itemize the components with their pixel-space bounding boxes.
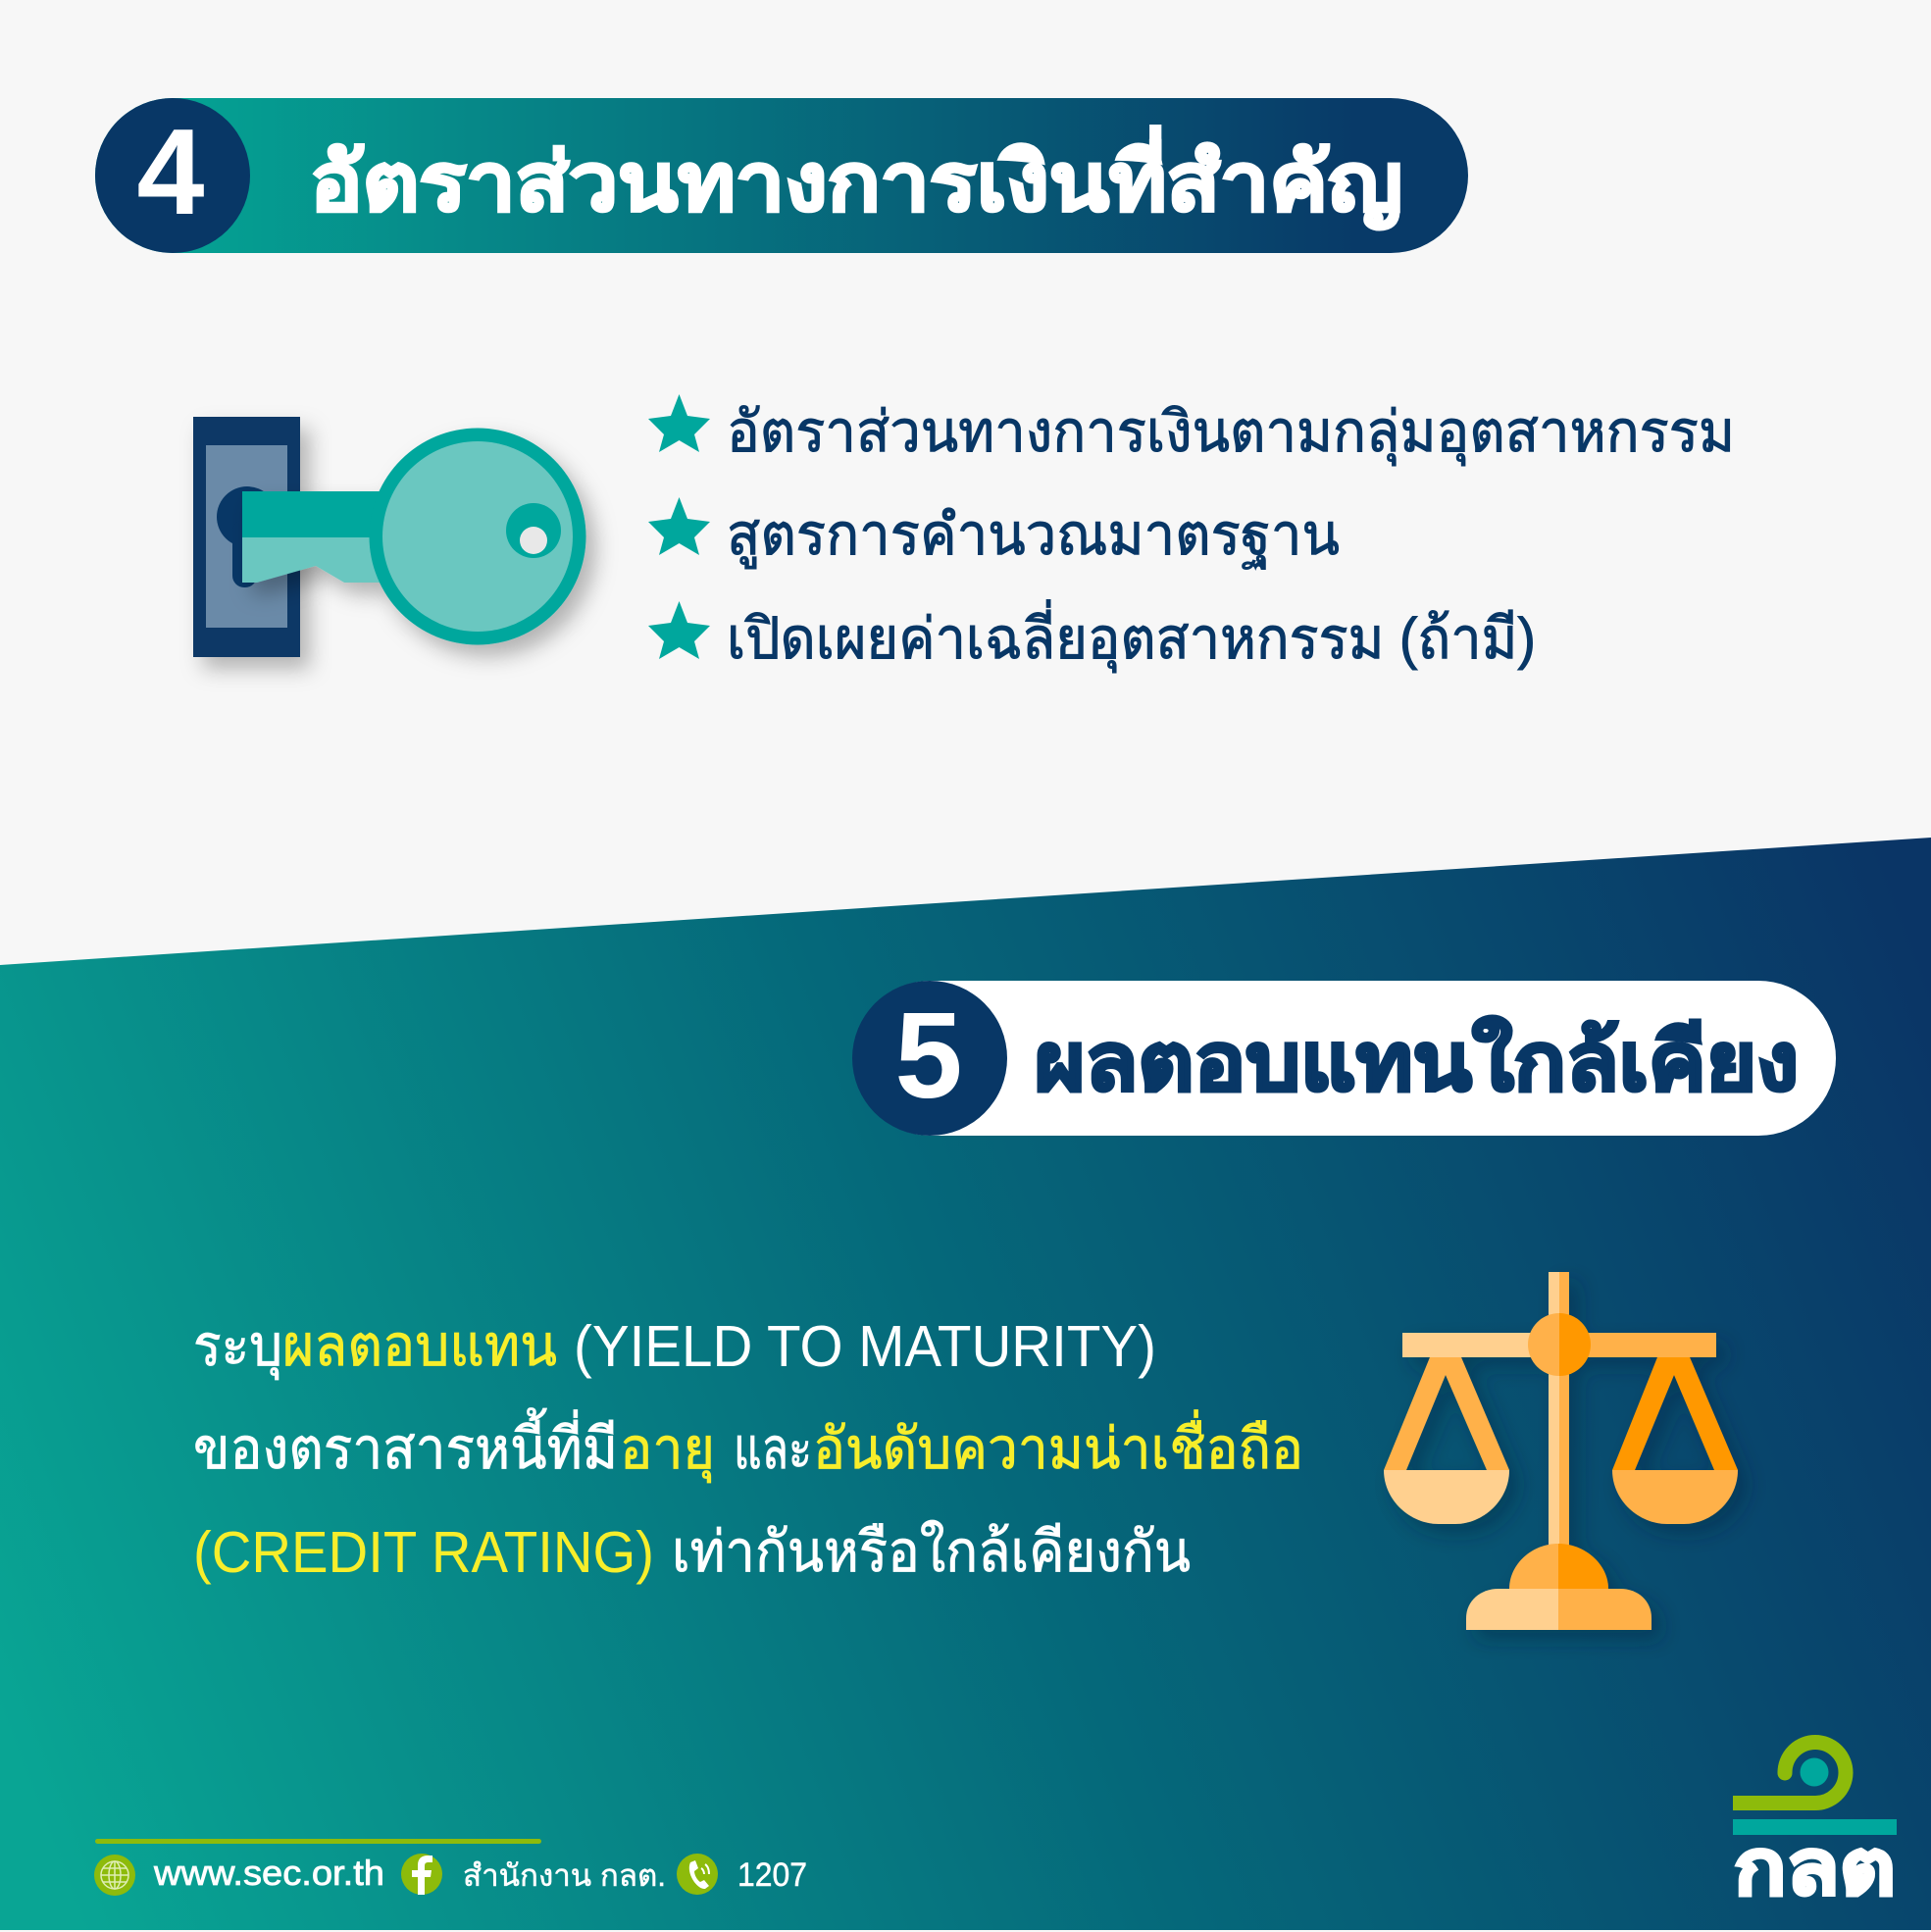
- bullet text 3: เปิดเผยค่าเฉลี่ยอุตสาหกรรม (ถ้ามี): [727, 599, 1536, 674]
- icon: phone: [677, 1854, 718, 1895]
- website: www.sec.or.th: [153, 1853, 384, 1893]
- bullet list: [648, 394, 1735, 674]
- heading text 4: อัตราส่วนทางการเงินที่สำคัญ: [310, 126, 1402, 230]
- footer: [94, 1839, 807, 1896]
- number badge 5: 5: [895, 989, 962, 1124]
- section 5 heading: [852, 981, 1836, 1136]
- logo mark: [1733, 1743, 1897, 1835]
- logo wordmark: กลต: [1734, 1824, 1896, 1910]
- icon: facebook: [401, 1854, 442, 1895]
- body paragraph: อายุ: [620, 1417, 715, 1484]
- icon: globe: [94, 1855, 135, 1896]
- heading text 5: ผลตอบแทนใกล้เคียง: [1035, 1016, 1799, 1107]
- body paragraph: ของตราสารหนี้ที่มี: [193, 1408, 618, 1481]
- body paragraph: และ: [734, 1417, 812, 1481]
- number badge 4: 4: [137, 105, 205, 240]
- star 3: [648, 601, 710, 659]
- section 4 heading: [95, 98, 1468, 253]
- logo: [1733, 1743, 1897, 1910]
- icon: key in keyhole: [193, 417, 586, 657]
- bullet text 1: อัตราส่วนทางการเงินตามกลุ่มอุตสาหกรรม: [727, 400, 1735, 467]
- body paragraph: ผลตอบแทน: [282, 1314, 557, 1378]
- body paragraph: อันดับความน่าเชื่อถือ: [813, 1409, 1303, 1481]
- hotline: 1207: [737, 1856, 807, 1894]
- heading pill white: [853, 981, 1836, 1136]
- icon: balance scale: [1384, 1272, 1738, 1630]
- panel: lower gradient section: [0, 838, 1931, 1930]
- star 1: [648, 394, 710, 452]
- lock plate: [193, 417, 300, 657]
- body paragraph: (YIELD TO MATURITY): [574, 1314, 1156, 1379]
- bullet text 2: สูตรการคำนวณมาตรฐาน: [727, 503, 1340, 569]
- number badge 4: [95, 98, 250, 253]
- body paragraph: (CREDIT RATING): [193, 1520, 654, 1585]
- heading pill: [95, 98, 1468, 253]
- facebook name: สำนักงาน กลต.: [463, 1858, 666, 1893]
- key: [242, 428, 586, 645]
- body paragraph: [193, 1314, 1303, 1585]
- number badge 5: [852, 981, 1007, 1136]
- star 2: [648, 497, 710, 555]
- body paragraph: เท่ากันหรือใกล้เคียงกัน: [672, 1519, 1191, 1584]
- body paragraph: ระบุ: [193, 1314, 282, 1381]
